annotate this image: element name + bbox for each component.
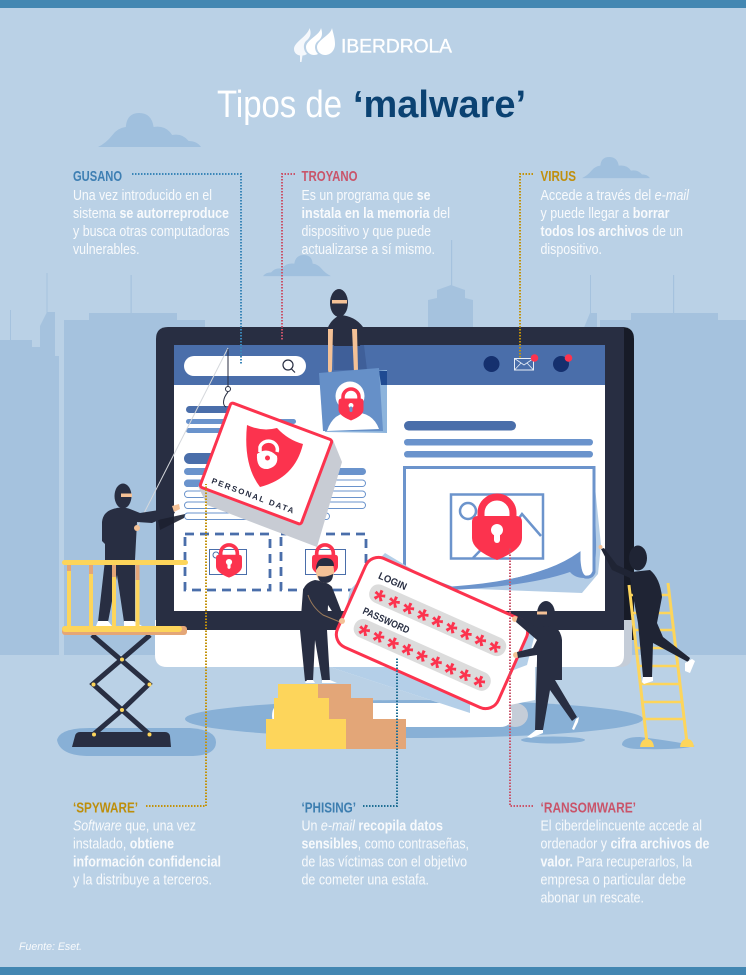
shoes — [96, 621, 142, 626]
heading: GUSANO — [73, 168, 122, 185]
notification icons — [484, 354, 572, 372]
thief head — [330, 289, 348, 317]
text block: gusano — [73, 168, 230, 258]
description: de las víctimas con el objetivo — [302, 854, 467, 870]
head — [629, 546, 647, 570]
hand — [598, 545, 602, 549]
monitor side shadow — [600, 327, 634, 640]
logo drops — [294, 28, 335, 62]
body and legs — [300, 580, 344, 681]
ladder rails — [629, 583, 687, 743]
head — [316, 559, 334, 583]
description: y busca otras computadoras — [73, 224, 230, 240]
description — [73, 188, 230, 258]
connector: ransomware — [510, 548, 533, 806]
description: información confidencial — [73, 854, 221, 870]
description: Accede a través del e-mail — [540, 188, 690, 204]
paper behind login card — [340, 553, 535, 690]
title — [217, 84, 526, 126]
description: dispositivo y que puede — [302, 224, 431, 240]
ladder rungs — [631, 595, 684, 719]
login asterisks: ********* — [365, 583, 505, 669]
text block: spyware — [73, 800, 221, 888]
head — [537, 601, 555, 627]
thief carrying login card — [516, 601, 579, 738]
login card — [332, 553, 532, 713]
ladder feet — [640, 739, 694, 747]
picture frame — [451, 494, 543, 558]
cloud left — [98, 113, 201, 147]
title bold part: ‘malware’ — [353, 84, 526, 126]
header shadow — [333, 345, 367, 370]
illustration: ground shadows — [57, 700, 695, 756]
password label: PASSWORD — [361, 606, 411, 636]
city skyline — [0, 240, 746, 655]
shield — [246, 425, 303, 487]
boxes — [266, 684, 406, 749]
bag strap — [308, 595, 340, 622]
description: abonar un rescate. — [540, 890, 644, 906]
browser header — [174, 345, 605, 385]
platform — [62, 626, 187, 635]
pivots — [92, 658, 152, 736]
card label: PERSONAL DATA — [210, 476, 295, 515]
text block: virus — [540, 168, 690, 258]
description — [540, 188, 690, 258]
scissor arms — [92, 635, 150, 734]
description: actualizarse a sí mismo. — [302, 242, 435, 258]
monitor chin — [155, 620, 632, 667]
thief on boxes — [300, 558, 344, 683]
text block: troyano — [302, 168, 450, 258]
description: empresa o particular debe — [540, 872, 686, 888]
description: Software que, una vez — [73, 818, 196, 834]
screen — [174, 345, 605, 611]
cloud right — [582, 157, 650, 178]
monitor bezel — [156, 327, 624, 630]
card body — [332, 553, 532, 713]
heading: ‘SPYWARE’ — [73, 800, 138, 816]
description — [302, 188, 450, 258]
avatar card — [323, 370, 387, 433]
ladder — [629, 583, 694, 747]
description — [302, 818, 469, 888]
personal data card — [138, 348, 342, 547]
top rail — [62, 560, 188, 565]
description: ordenador y cifra archivos de — [540, 836, 710, 852]
heading: ‘RANSOMWARE’ — [540, 800, 636, 816]
logo wordmark: IBERDROLA — [341, 36, 452, 58]
rod shadow — [158, 514, 185, 530]
heading: VIRUS — [540, 168, 576, 185]
card shadow — [198, 440, 342, 547]
text block: ransomware — [540, 800, 710, 906]
description: Es un programa que se — [302, 188, 430, 204]
search box — [184, 356, 306, 376]
big padlock — [472, 497, 522, 560]
description: Un e-mail recopila datos — [302, 818, 443, 834]
hands — [172, 504, 180, 512]
description: instalado, obtiene — [73, 836, 174, 852]
shoes — [305, 680, 337, 683]
left content lines — [184, 406, 366, 520]
bottom bar — [0, 967, 746, 975]
connector: spyware — [146, 484, 206, 806]
description: sistema se autorreproduce — [73, 206, 229, 222]
description: sensibles, como contraseñas, — [302, 836, 469, 852]
head — [114, 484, 132, 508]
body and legs — [516, 616, 577, 730]
description: El ciberdelincuente accede al — [540, 818, 702, 834]
top bar — [0, 0, 746, 8]
description: todos los archivos de un — [540, 224, 683, 240]
description — [540, 818, 710, 906]
shoes — [527, 717, 579, 738]
login field — [366, 581, 509, 659]
title light part: Tipos de — [217, 84, 342, 126]
connector: gusano — [132, 174, 241, 364]
description: y puede llegar a borrar — [540, 206, 670, 222]
thief on ladder — [598, 545, 695, 684]
railing posts — [67, 565, 140, 626]
thief hands on login card — [339, 616, 519, 658]
fishing line and hook — [138, 348, 232, 525]
description: vulnerables. — [73, 242, 140, 258]
connector: phising — [363, 657, 397, 806]
scissor lift — [62, 560, 188, 747]
description: instala en la memoria del — [302, 206, 450, 222]
monitor — [155, 327, 634, 667]
description: Una vez introducido en el — [73, 188, 212, 204]
shield padlock — [257, 441, 277, 469]
body and legs — [601, 548, 690, 677]
dashed box one — [185, 534, 270, 590]
description: dispositivo. — [540, 242, 602, 258]
source note: Fuente: Eset. — [19, 941, 82, 953]
thief arms — [328, 329, 333, 374]
description — [73, 818, 221, 888]
password field — [351, 616, 494, 694]
logo — [294, 28, 452, 62]
heading: ‘PHISING’ — [302, 800, 356, 816]
thief on top with avatar card — [319, 289, 387, 433]
text block: phising — [302, 800, 469, 888]
thief left on lift — [96, 484, 185, 626]
description: de cometer una estafa. — [302, 872, 429, 888]
password asterisks: ********* — [350, 618, 489, 704]
body — [98, 508, 175, 622]
dashed box two — [281, 534, 366, 590]
thief torso — [327, 315, 363, 346]
card body — [200, 402, 332, 525]
base — [72, 732, 171, 747]
shoes — [642, 659, 695, 684]
connector: troyano — [282, 174, 295, 340]
login label: LOGIN — [376, 571, 408, 593]
cloud centre — [263, 255, 331, 276]
description: valor. Para recuperarlos, la — [540, 854, 693, 870]
right content lines — [404, 421, 593, 458]
description: y la distribuye a terceros. — [73, 872, 212, 888]
monitor stand — [272, 640, 535, 727]
page with picture and curl — [404, 468, 601, 593]
heading: TROYANO — [302, 168, 358, 185]
connector: virus — [520, 174, 533, 358]
